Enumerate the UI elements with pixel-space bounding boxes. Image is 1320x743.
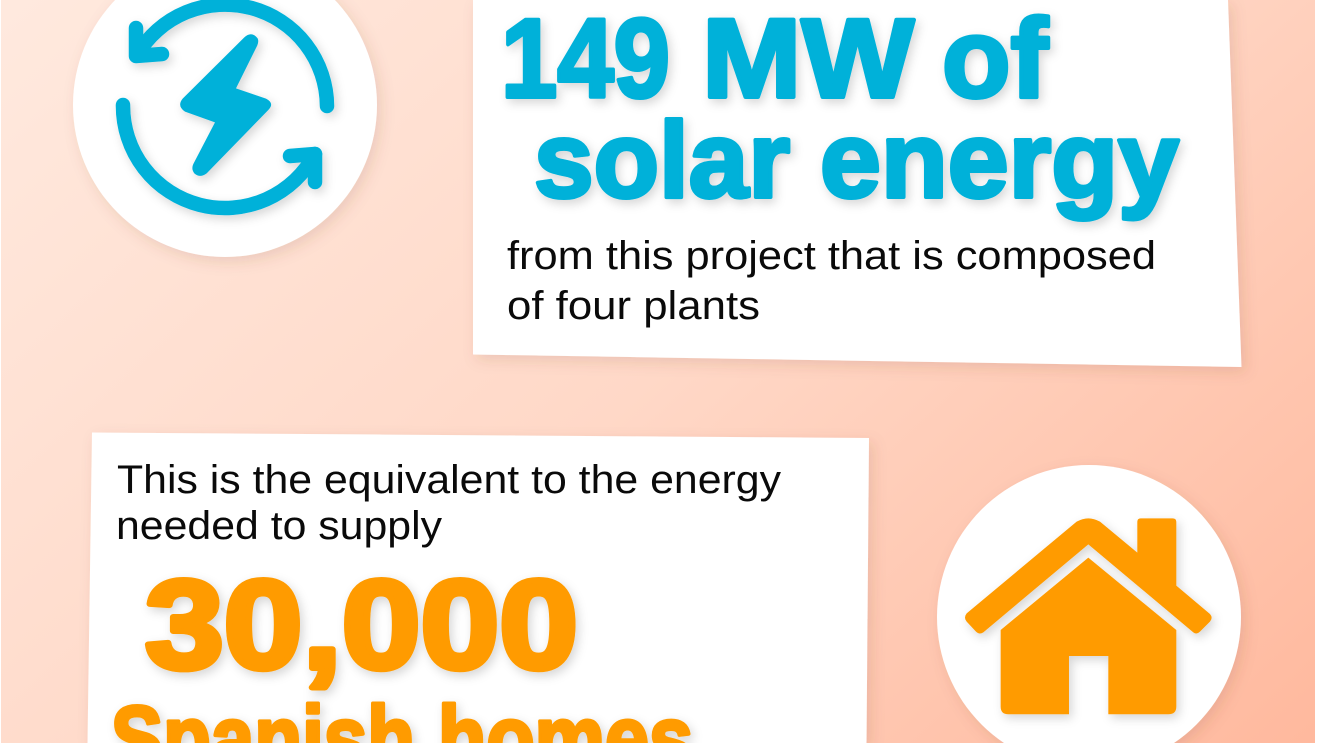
panel: homes equivalent bbox=[88, 432, 869, 743]
icon: house bbox=[965, 518, 1212, 714]
icon: lightning bolt with circular arrows bbox=[123, 5, 327, 208]
icon: renewable energy circle bbox=[73, 0, 377, 257]
text: project description bbox=[507, 234, 1156, 328]
heading: 30,000 Spanish homes: 30,000 bbox=[145, 554, 578, 695]
panel: solar energy bbox=[473, 0, 1242, 367]
text: project description: from this project that is composed bbox=[507, 234, 1156, 278]
icon: home circle bbox=[937, 465, 1241, 743]
heading: 149 MW of solar energy bbox=[501, 0, 1179, 220]
heading: 149 MW of solar energy: solar bbox=[534, 99, 790, 220]
heading: 30,000 Spanish homes bbox=[111, 554, 693, 743]
text: equivalent description bbox=[116, 458, 781, 548]
heading: 149 MW of solar energy: energy bbox=[820, 99, 1179, 220]
text: equivalent description: needed to supply bbox=[116, 504, 442, 548]
text: project description: of four plants bbox=[507, 284, 760, 328]
text: equivalent description: This is the equivalent to the energy bbox=[117, 458, 781, 502]
